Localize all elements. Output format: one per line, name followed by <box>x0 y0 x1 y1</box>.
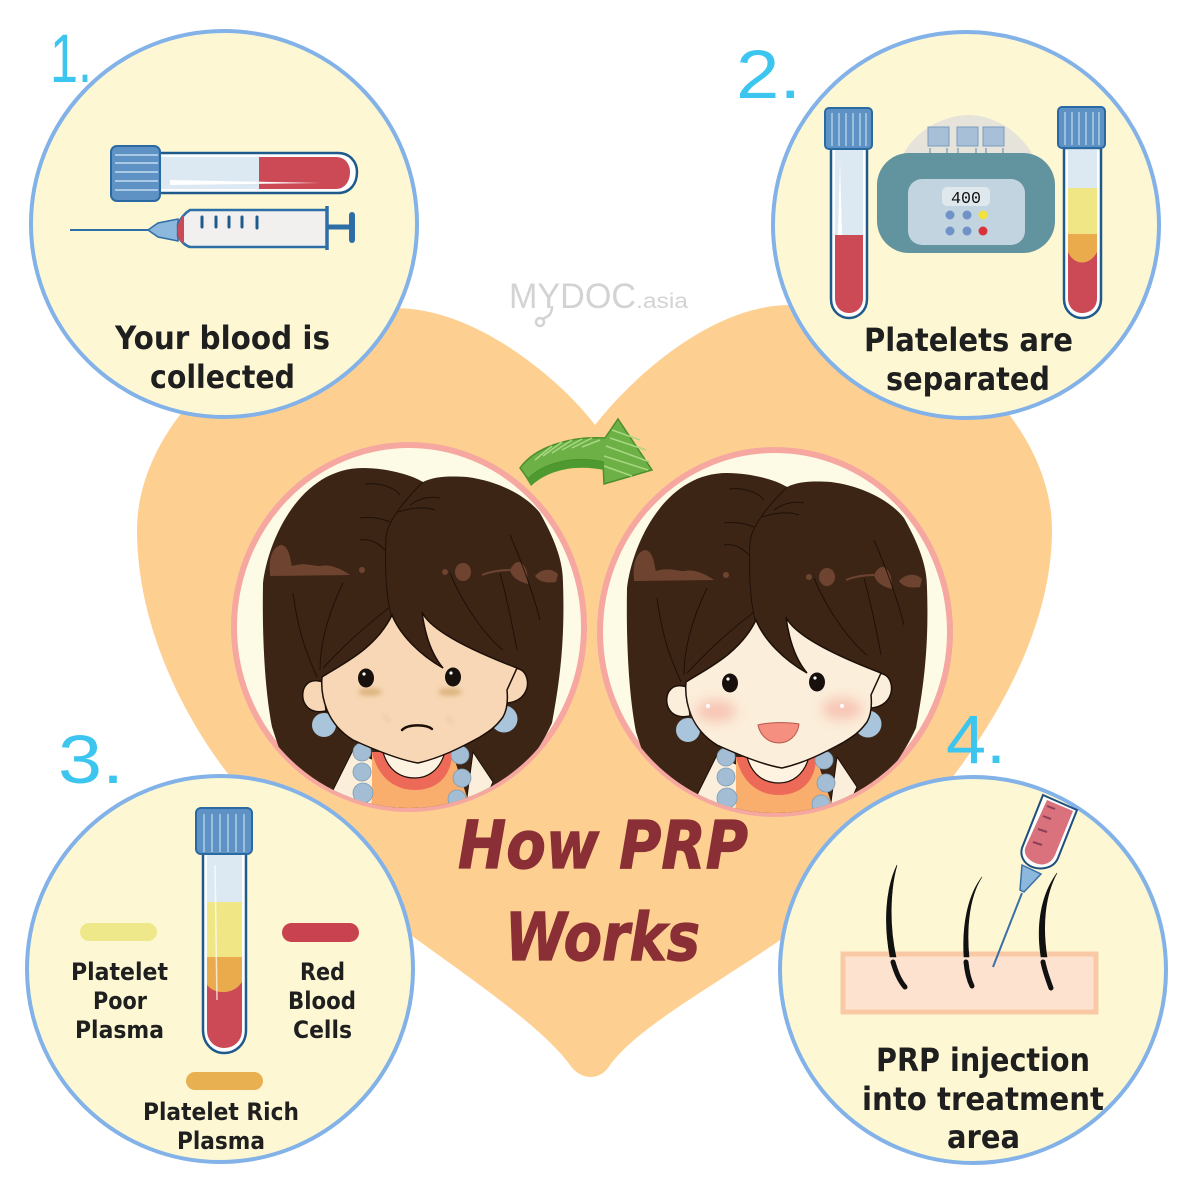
step 4 caption: area <box>947 1118 1020 1156</box>
icon: separated tube after <box>1058 107 1105 318</box>
legend: platelet poor plasma <box>71 923 168 1044</box>
portrait: before treatment <box>234 445 584 812</box>
step 2 number: 2. <box>736 36 801 113</box>
panel: step 2 platelets separated <box>773 32 1159 418</box>
portrait: after treatment <box>600 450 950 817</box>
legend: red blood cells: Red <box>300 958 345 986</box>
heart background <box>137 305 1052 1077</box>
step 1 caption: Your blood is <box>114 319 330 357</box>
panel: step 1 blood collected <box>31 31 417 417</box>
icon: blood tube before <box>825 108 872 318</box>
legend: platelet poor plasma: Platelet <box>71 958 168 986</box>
panel: step 3 blood components <box>27 776 413 1162</box>
step 4 caption: into treatment <box>862 1080 1104 1118</box>
step 3 number: 3. <box>58 721 124 798</box>
icon: syringe <box>70 206 352 250</box>
step 4 number: 4. <box>946 701 1006 778</box>
icon: centrifuge machine <box>877 115 1055 253</box>
icon: horizontal blood tube <box>111 146 357 201</box>
arrow: before to after <box>520 419 652 486</box>
icon: separated tube with layers <box>196 808 252 1053</box>
icon: PRP syringe <box>993 795 1077 967</box>
step 2 caption: separated <box>886 360 1050 398</box>
icon: skin with hairs <box>843 865 1096 1012</box>
panel: step 4 PRP injection <box>780 777 1166 1163</box>
step 2 caption <box>864 321 1073 398</box>
legend: platelet rich plasma <box>143 1072 299 1155</box>
title: Works <box>505 899 700 976</box>
logo: MyDOC.asia: .asia <box>636 290 688 313</box>
step 1 caption: collected <box>150 358 295 396</box>
legend: red blood cells: Cells <box>293 1016 352 1044</box>
logo: MyDOC.asia <box>509 277 688 326</box>
step 1 number: 1. <box>50 20 92 97</box>
step 1 caption <box>114 319 330 396</box>
step 2 caption: Platelets are <box>864 321 1073 359</box>
machine display: 400 <box>951 190 981 209</box>
legend: platelet poor plasma: Plasma <box>75 1016 164 1044</box>
step 4 caption: PRP injection <box>876 1041 1090 1079</box>
legend: platelet poor plasma: Poor <box>93 987 147 1015</box>
title: How PRP <box>458 807 748 884</box>
title <box>458 807 748 976</box>
legend: red blood cells <box>282 923 359 1044</box>
logo: MyDOC.asia: MYDOC <box>509 277 636 316</box>
legend: red blood cells: Blood <box>288 987 356 1015</box>
step 4 caption <box>862 1041 1104 1156</box>
legend: platelet rich plasma: Plasma <box>177 1127 265 1155</box>
legend: platelet rich plasma: Platelet Rich <box>143 1098 299 1126</box>
